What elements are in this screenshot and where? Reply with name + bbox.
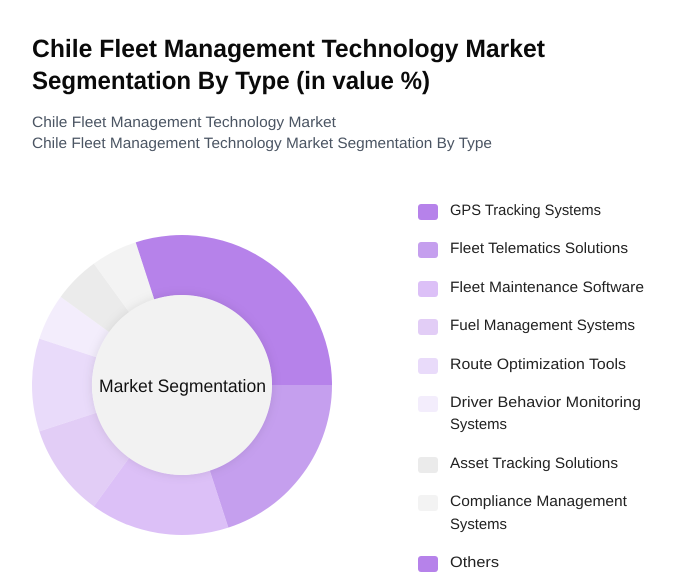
legend item: Driver Behavior Monitoring Systems: Driver Behavior Monitoring — [450, 394, 641, 411]
donut chart — [32, 235, 332, 535]
legend — [418, 202, 644, 572]
legend item: Others: Others — [450, 554, 499, 571]
segment: Compliance Management Systems — [94, 242, 154, 312]
legend item: Driver Behavior Monitoring Systems: Systems — [450, 416, 507, 433]
legend item: Route Optimization Tools: Route Optimization Tools — [450, 356, 626, 373]
legend item: Fuel Management Systems: Fuel Management Systems — [450, 317, 635, 334]
legend item: Asset Tracking Solutions: Asset Tracking Solutions — [450, 455, 618, 472]
title: Chile Fleet Management Technology Market — [32, 35, 546, 63]
centre label: Market Segmentation — [99, 376, 266, 396]
segment: Fleet Maintenance Software — [94, 458, 228, 535]
subtitle: Chile Fleet Management Technology Market Segmentation By Type — [32, 135, 492, 152]
legend item: Fleet Maintenance Software: Fleet Maintenance Software — [450, 279, 644, 296]
legend item: Driver Behavior Monitoring Systems — [418, 394, 641, 433]
segment: Route Optimization Tools — [32, 339, 96, 431]
segment: GPS Tracking Systems — [136, 235, 332, 385]
segment: Fuel Management Systems — [39, 413, 129, 506]
segment: Fleet Telematics Solutions — [210, 385, 332, 528]
title: Segmentation By Type (in value %) — [32, 67, 430, 95]
title — [32, 35, 546, 95]
subtitle — [32, 114, 492, 152]
legend item: Others — [418, 554, 499, 572]
legend item: Compliance Management Systems: Systems — [450, 516, 507, 533]
segment: Asset Tracking Solutions — [61, 264, 129, 332]
legend item: Fleet Telematics Solutions: Fleet Telematics Solutions — [450, 240, 628, 257]
subtitle: Chile Fleet Management Technology Market — [32, 114, 337, 131]
legend item: Compliance Management Systems — [418, 493, 628, 533]
legend item: Compliance Management Systems: Compliance Management — [450, 493, 628, 510]
legend item: GPS Tracking Systems: GPS Tracking Systems — [450, 202, 601, 219]
donut centre — [92, 295, 272, 475]
segment: Driver Behavior Monitoring Systems — [39, 297, 109, 357]
